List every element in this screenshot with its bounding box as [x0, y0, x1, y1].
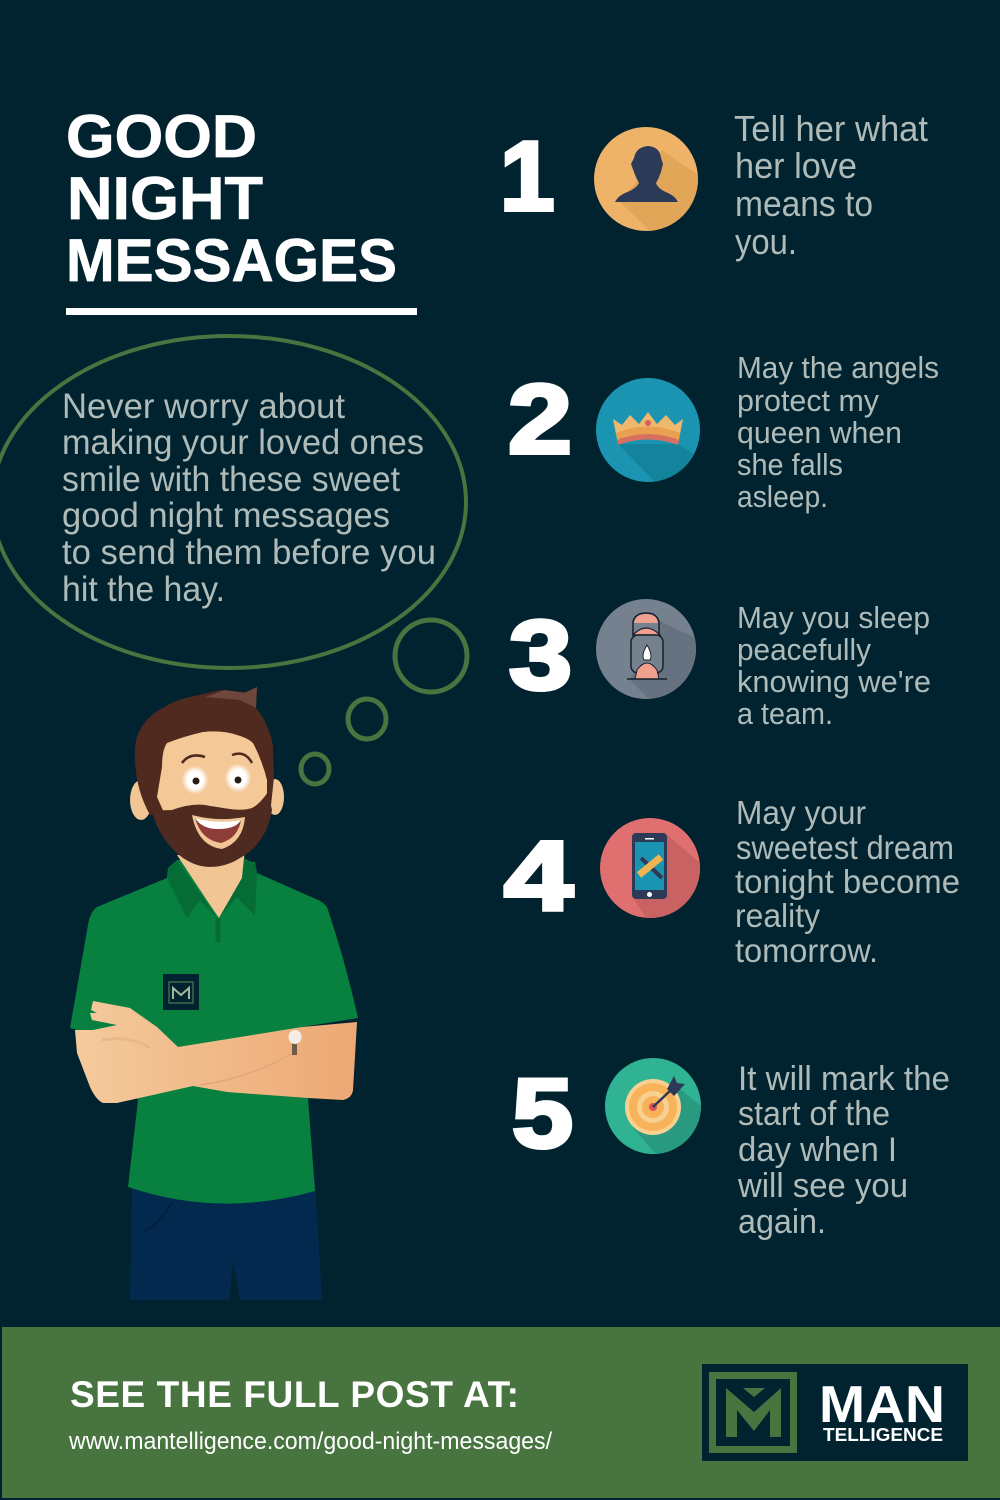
item 3 text: knowing we're	[737, 664, 931, 699]
item 4 icon: phone	[600, 818, 700, 918]
item 5 text: It will mark the	[738, 1060, 950, 1098]
head	[130, 687, 284, 867]
item 3 text	[737, 600, 931, 731]
item 4 text: tonight become	[735, 863, 960, 900]
title underline	[66, 308, 417, 315]
thought bubble	[0, 336, 467, 784]
item 5 text: again.	[738, 1203, 826, 1241]
intro text: making your loved ones	[62, 423, 424, 462]
face	[157, 731, 267, 845]
item 2 text: protect my	[737, 383, 879, 418]
logo	[702, 1364, 968, 1461]
intro text: good night messages	[62, 496, 390, 535]
intro text: smile with these sweet	[62, 460, 400, 499]
beard	[150, 792, 272, 867]
item 4 text: reality	[735, 897, 820, 934]
item 5 text: day when I	[738, 1131, 897, 1169]
item 5 text: will see you	[737, 1167, 908, 1205]
item 3 text: peacefully	[737, 632, 871, 667]
item 3 text: May you sleep	[737, 600, 930, 635]
footer heading: SEE THE FULL POST AT:	[70, 1374, 519, 1415]
item 5 icon: target	[605, 1058, 701, 1154]
item 1 text: her love	[735, 145, 857, 186]
hair highlight	[205, 687, 257, 708]
logo: TELLIGENCE	[823, 1425, 943, 1445]
item 3 number: 3	[509, 600, 572, 710]
character: bearded man with crossed arms	[70, 687, 358, 1300]
eyes	[182, 754, 252, 794]
title: NIGHT	[67, 165, 263, 232]
watch	[288, 1030, 302, 1055]
item 2 text: she falls	[737, 447, 843, 482]
item 2 text: queen when	[737, 415, 902, 450]
item 3 icon: lantern	[596, 599, 696, 699]
title: GOOD	[66, 103, 257, 170]
item 1 text: means to	[735, 183, 873, 224]
item 5 text: start of the	[738, 1095, 890, 1133]
intro text: to send them before you	[62, 533, 436, 572]
item 2 text	[737, 350, 939, 514]
footer panel	[2, 1327, 1000, 1498]
item 1 icon: person	[594, 127, 698, 231]
item 4 text: May your	[736, 794, 866, 831]
item 5 text	[737, 1060, 950, 1241]
title	[66, 103, 397, 294]
intro text	[62, 387, 436, 609]
item 1 text: you.	[735, 221, 797, 262]
logo: MAN	[819, 1376, 945, 1434]
item 1 number: 1	[500, 121, 555, 231]
item 5 number: 5	[512, 1058, 573, 1168]
item 4 number: 4	[504, 821, 573, 931]
mouth	[192, 815, 245, 849]
crossed arms	[75, 1001, 357, 1103]
shirt badge	[163, 974, 199, 1010]
shirt	[70, 850, 358, 1204]
intro text: Never worry about	[62, 387, 345, 426]
item 2 icon: crown	[596, 378, 700, 482]
item 4 text: sweetest dream	[736, 829, 954, 866]
title: MESSAGES	[66, 227, 397, 294]
item 2 text: May the angels	[737, 350, 939, 385]
item 2 number: 2	[508, 364, 572, 474]
item 1 text	[734, 108, 928, 262]
footer url: www.mantelligence.com/good-night-messages/	[68, 1428, 552, 1455]
item 1 text: Tell her what	[734, 108, 928, 149]
item 2 text: asleep.	[737, 479, 828, 514]
item 4 text: tomorrow.	[735, 932, 878, 969]
trousers	[130, 1180, 322, 1300]
hair	[135, 687, 274, 815]
item 4 text	[735, 794, 960, 969]
ears	[130, 779, 284, 820]
intro text: hit the hay.	[62, 570, 225, 609]
item 3 text: a team.	[737, 696, 833, 731]
